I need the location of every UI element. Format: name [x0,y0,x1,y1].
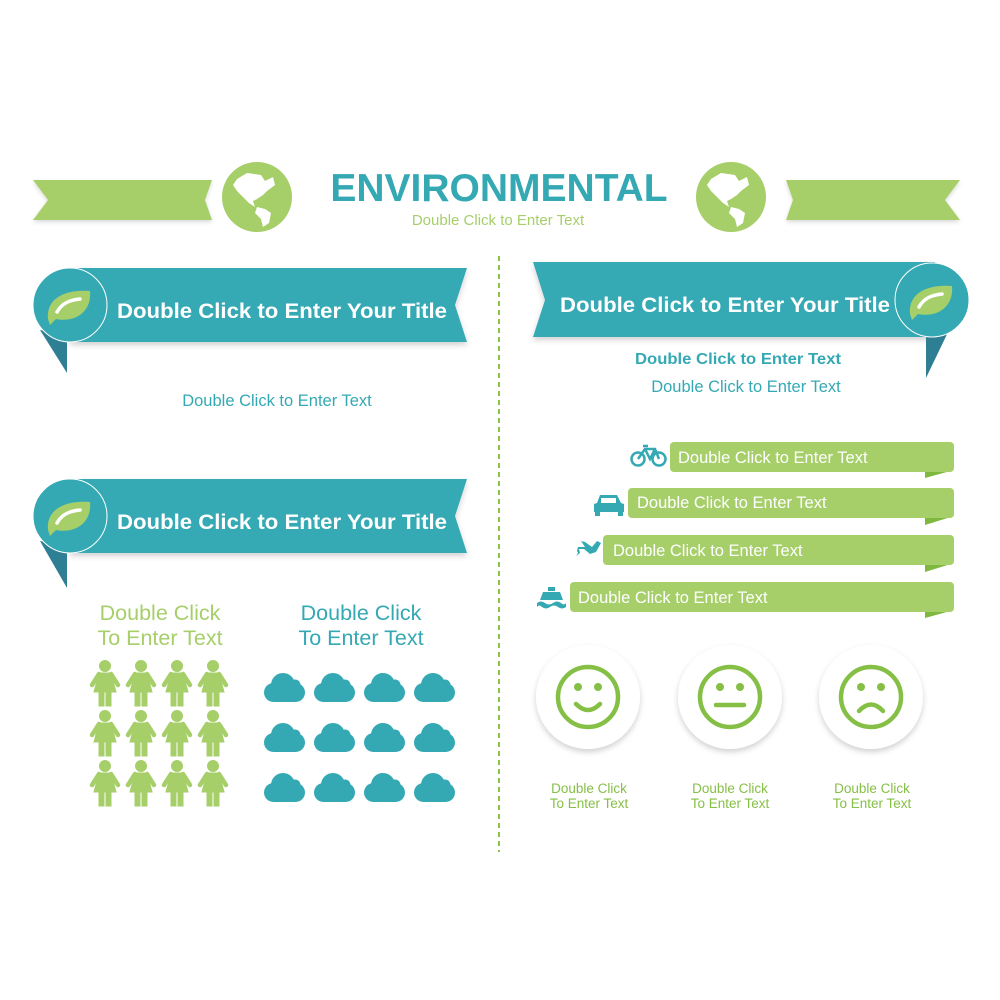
icon: globe right [686,152,776,242]
transport bars [570,442,954,618]
icon: car [594,495,624,516]
smiley labels: To Enter Text [691,796,770,811]
cloud grid [264,673,455,802]
smiley labels: Double Click [834,781,910,796]
smiley labels: To Enter Text [550,796,629,811]
transport bars: Double Click to Enter Text [678,449,868,467]
smiley: neutral [678,645,782,749]
smiley: happy [536,645,640,749]
transport bars: Double Click to Enter Text [578,589,768,607]
smiley labels: To Enter Text [833,796,912,811]
smiley labels [550,781,912,811]
label: people: Double Click [100,601,221,625]
subtitle: Double Click to Enter Text [412,212,585,229]
icon: ship [537,587,566,608]
label: clouds: To Enter Text [298,626,424,650]
divider [498,256,500,852]
transport bars: Double Click to Enter Text [613,542,803,560]
label: people: To Enter Text [97,626,223,650]
banner: left 2: Double Click to Enter Your Title [117,511,447,534]
banner: right: Double Click to Enter Your Title [560,294,890,317]
icon: globe left [212,152,302,242]
transport bars: Double Click to Enter Text [637,494,827,512]
banner: left 1: Double Click to Enter Your Title [117,300,447,323]
header ribbon right [786,180,960,220]
icon: bike [632,446,666,466]
smiley labels: Double Click [551,781,627,796]
header ribbon left [33,180,212,220]
people grid [92,660,226,806]
text block right [635,351,842,396]
label: clouds: Double Click [301,601,422,625]
banner: left 1 [33,268,467,373]
smiley labels: Double Click [692,781,768,796]
text block right: Double Click to Enter Text [635,351,842,368]
banner: left 2 [33,479,467,588]
smiley: sad [819,645,923,749]
banner: right [533,262,969,378]
text block left 1: Double Click to Enter Text [182,392,372,410]
title: ENVIRONMENTAL [330,167,668,210]
text block right: Double Click to Enter Text [651,378,841,396]
icon: plane [576,541,601,556]
